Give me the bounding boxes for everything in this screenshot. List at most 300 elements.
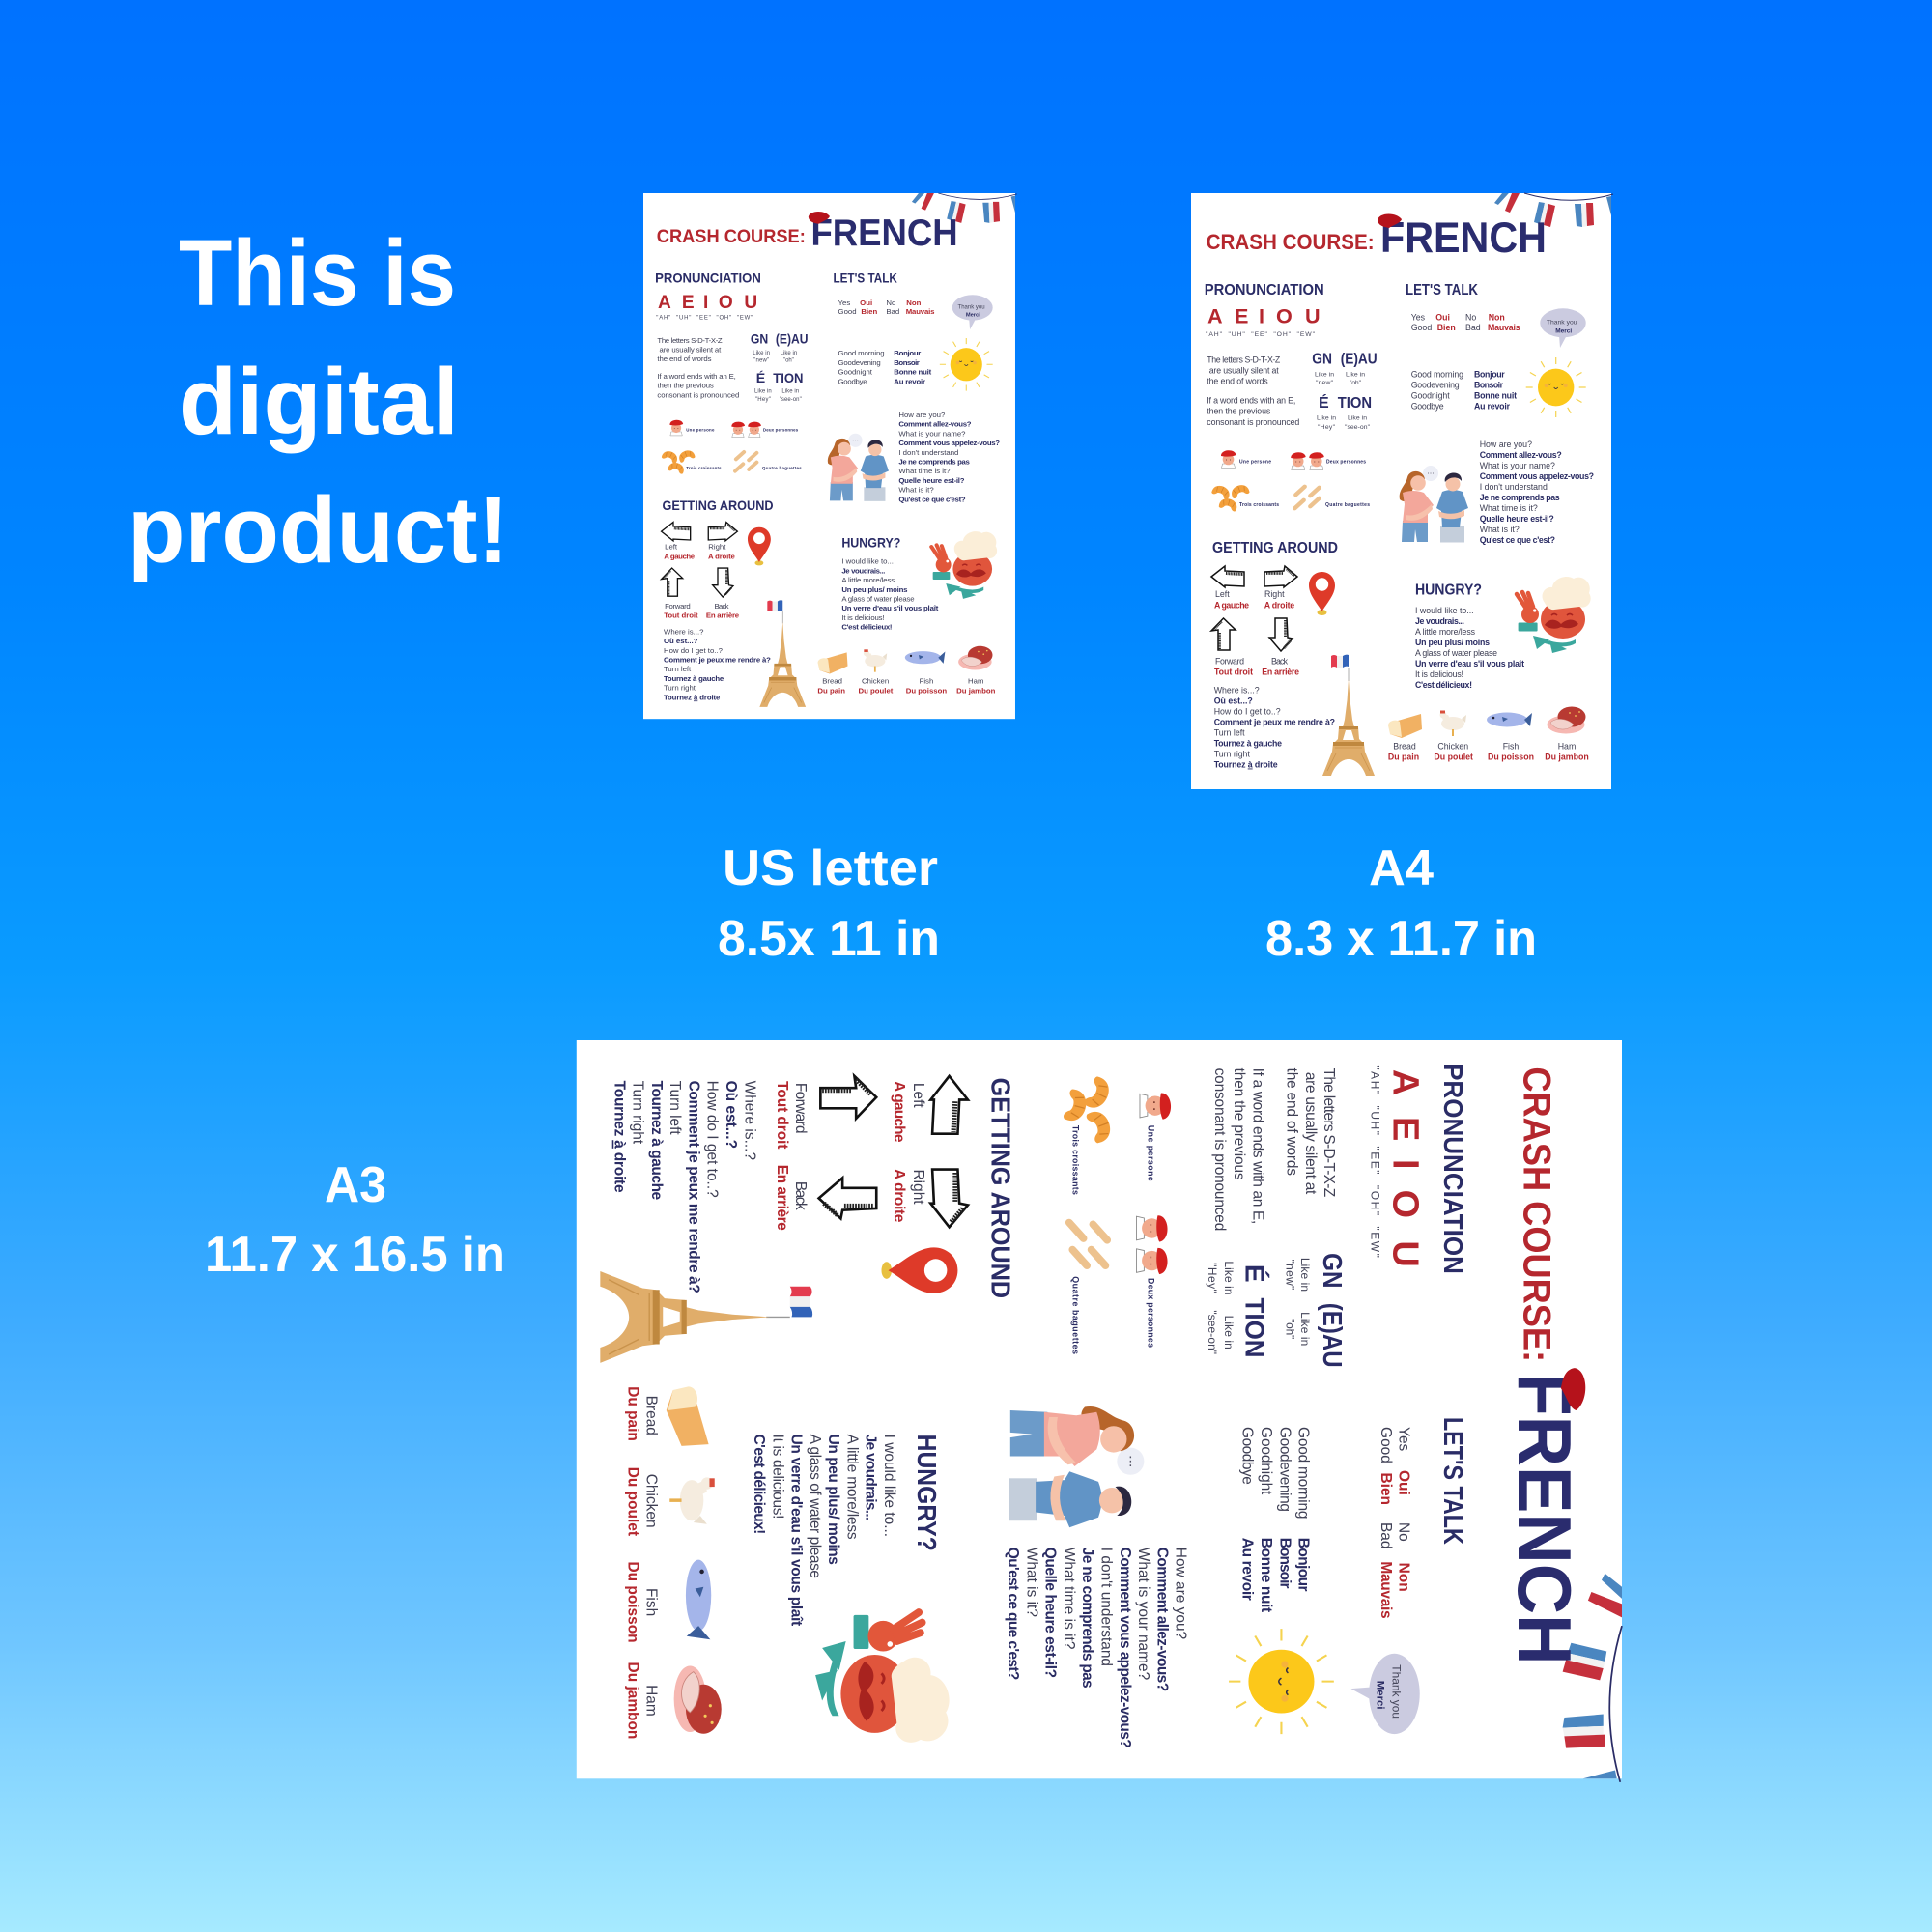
section: pronunciation: Like in <box>1298 1258 1312 1292</box>
section: hungry: I would like to... <box>881 1435 897 1537</box>
section: getting around: En arrière <box>774 1165 790 1231</box>
size label: A4: A4 <box>1369 840 1434 896</box>
icon: one person <box>1140 1093 1171 1120</box>
food row: Bread <box>1393 742 1416 752</box>
section: let's talk: What time is it? <box>1061 1548 1077 1650</box>
section: getting around: Tournez à droite <box>1214 759 1278 769</box>
title <box>1502 1066 1587 1665</box>
title: FRENCH <box>1502 1373 1587 1665</box>
section: getting around: Comment je peux me rendre à? <box>685 1081 701 1293</box>
section: pronunciation: "oh" <box>1350 380 1362 386</box>
section: let's talk: What time is it? <box>898 467 951 475</box>
section: hungry: I would like to... <box>1415 606 1474 615</box>
food row <box>817 646 996 695</box>
section: pronunciation: AEIOU <box>1385 1069 1426 1267</box>
section: pronunciation: Like in <box>1317 414 1336 421</box>
section: getting around: A droite <box>1264 600 1294 610</box>
food row: Du poisson <box>906 686 947 695</box>
section: pronunciation: If a word ends with an E, <box>1250 1068 1265 1224</box>
section: pronunciation: "new" <box>1316 380 1334 386</box>
section: let's talk: Bonjour <box>1295 1538 1312 1591</box>
section: getting around: A gauche <box>891 1081 907 1143</box>
food row: Chicken <box>643 1474 660 1528</box>
section: let's talk: Goodevening <box>1411 381 1460 390</box>
section: getting around: Tournez à gauche <box>664 674 724 683</box>
section: let's talk: Au revoir <box>894 377 925 385</box>
section: let's talk: Good <box>1378 1427 1394 1463</box>
section: pronunciation <box>655 270 809 403</box>
icon: croissants <box>661 448 696 474</box>
food row: Fish <box>1503 742 1519 752</box>
title: CRASH COURSE: <box>657 226 806 247</box>
section: let's talk: I don't understand <box>1098 1548 1115 1666</box>
section: getting around: En arrière <box>706 611 740 620</box>
headline: This is digital product! <box>128 220 509 582</box>
section: getting around: Back <box>1271 656 1289 666</box>
icon: one person <box>669 420 683 436</box>
icon: croissants <box>1063 1075 1114 1144</box>
section: getting around: Back <box>792 1181 809 1210</box>
section: let's talk: What is your name? <box>1135 1548 1151 1681</box>
section: pronunciation: are usually silent at <box>660 346 722 354</box>
food row: Bread <box>822 677 842 686</box>
section: pronunciation: the end of words <box>1284 1068 1300 1176</box>
food row: Ham <box>643 1685 660 1717</box>
section: pronunciation: "oh" <box>1284 1319 1297 1339</box>
section: pronunciation: "Hey" <box>1206 1263 1219 1293</box>
speech bubble: thank you: Merci <box>1375 1681 1386 1710</box>
icon: beret <box>1378 213 1402 228</box>
icon: baguettes <box>732 449 759 473</box>
section: let's talk: Je ne comprends pas <box>1480 493 1560 502</box>
section: let's talk: Bad <box>886 307 899 316</box>
section: let's talk: What is your name? <box>1480 461 1555 470</box>
section: let's talk: Mauvais <box>1378 1561 1394 1619</box>
section: getting around: How do I get to..? <box>1214 707 1281 717</box>
section: pronunciation: (E)AU <box>1318 1303 1348 1368</box>
headline: This is digital product!: This is <box>179 220 456 326</box>
food row: Du pain <box>624 1386 640 1441</box>
section: let's talk: Quelle heure est-il? <box>898 476 965 485</box>
section: getting around: Turn left <box>664 665 692 673</box>
speech bubble: thank you: Merci <box>966 312 980 318</box>
icon: sun <box>1229 1629 1334 1734</box>
section: getting around: Tout droit <box>774 1081 790 1149</box>
icon: Eiffel tower <box>1322 655 1375 776</box>
section: let's talk: Good <box>1411 323 1432 332</box>
section: let's talk: Goodnight <box>1411 391 1450 401</box>
food row: Du poulet <box>1434 752 1473 761</box>
section: hungry: I would like to... <box>841 557 894 566</box>
food row <box>624 1386 722 1739</box>
section: let's talk: Bonsoir <box>894 358 920 367</box>
section: let's talk: Goodevening <box>838 358 881 367</box>
food row: Bread <box>643 1396 660 1435</box>
section: pronunciation: GN <box>1318 1253 1348 1289</box>
section: pronunciation: É <box>1240 1264 1270 1283</box>
section: pronunciation: Like in <box>1222 1261 1236 1295</box>
section: let's talk: Goodnight <box>1258 1427 1274 1495</box>
section: pronunciation: are usually silent at <box>1302 1072 1319 1195</box>
section: let's talk: What is it? <box>1480 525 1520 534</box>
section: hungry: A little more/less <box>841 576 895 584</box>
section: let's talk: Bonsoir <box>1474 381 1504 390</box>
label: quatre baguettes: Quatre baguettes <box>762 466 802 470</box>
size label: A4 <box>1265 840 1537 967</box>
section: let's talk: What is it? <box>1023 1548 1039 1617</box>
section: let's talk: Qu'est ce que c'est? <box>898 495 966 503</box>
section: getting around: Tournez à droite <box>611 1081 627 1193</box>
section: pronunciation: then the previous <box>1207 406 1271 415</box>
section: let's talk: Oui <box>1396 1470 1412 1495</box>
label: trois croissants: Trois croissants <box>1071 1125 1081 1195</box>
section: pronunciation: consonant is pronounced <box>1211 1068 1228 1231</box>
section: let's talk: Goodnight <box>838 368 873 377</box>
section: hungry: It is delicious! <box>769 1435 785 1519</box>
section: let's talk: Oui <box>1435 312 1450 322</box>
section: let's talk: Goodevening <box>1276 1427 1293 1512</box>
section: let's talk: Oui <box>860 298 872 307</box>
section: getting around: A droite <box>891 1169 907 1223</box>
food row: Du poisson <box>1488 752 1534 761</box>
section: pronunciation: Like in <box>781 389 799 395</box>
section: let's talk: Je ne comprends pas <box>1079 1548 1095 1689</box>
section: let's talk: No <box>1465 312 1476 322</box>
section: let's talk: Bonjour <box>1474 370 1505 380</box>
section: pronunciation: "AH" "UH" "EE" "OH" "EW" <box>1368 1065 1381 1258</box>
bunting <box>1494 193 1613 227</box>
section: hungry: A glass of water please <box>841 594 915 603</box>
section: getting around <box>611 1076 1015 1298</box>
section: getting around: Where is...? <box>741 1081 757 1160</box>
section: getting around: Right <box>910 1170 926 1205</box>
section: hungry: Un verre d'eau s'il vous plaît <box>1415 659 1524 668</box>
food row: Ham <box>1558 742 1576 752</box>
section: pronunciation: If a word ends with an E, <box>657 372 736 381</box>
section: let's talk: Good morning <box>1411 370 1463 380</box>
food row: Du jambon <box>624 1662 640 1739</box>
title <box>657 212 958 254</box>
section: pronunciation: (E)AU <box>776 331 809 346</box>
section: let's talk: Qu'est ce que c'est? <box>1480 535 1555 545</box>
food row: Fish <box>920 677 933 686</box>
section: let's talk: I don't understand <box>1480 482 1548 492</box>
section: let's talk: LET'S TALK <box>1406 282 1478 298</box>
speech bubble: thank you <box>1540 308 1586 348</box>
section: let's talk: Bien <box>861 307 878 316</box>
title: FRENCH <box>810 212 958 254</box>
section: let's talk: How are you? <box>898 411 946 419</box>
section: pronunciation: Like in <box>1315 371 1334 378</box>
section: getting around: GETTING AROUND <box>1212 540 1338 556</box>
section: pronunciation: The letters S-D-T-X-Z <box>1207 355 1281 365</box>
speech bubble: thank you: Thank you <box>1547 319 1577 327</box>
section: let's talk: What is it? <box>898 486 934 495</box>
section: pronunciation: PRONUNCIATION <box>1205 282 1324 298</box>
food row: Du poisson <box>624 1561 640 1643</box>
title <box>1207 214 1547 262</box>
speech bubble: thank you: Thank you <box>958 305 985 311</box>
food row: Chicken <box>862 677 889 686</box>
section: pronunciation: Like in <box>781 351 797 356</box>
food row <box>1388 707 1589 761</box>
section: let's talk: Bad <box>1465 323 1481 332</box>
panel: A3 poster rotated <box>577 1040 1622 1782</box>
section: getting around: Back <box>714 602 729 611</box>
section: pronunciation: AEIOU <box>658 293 757 313</box>
section: let's talk: Goodbye <box>1239 1427 1256 1485</box>
label: une persone: Une persone <box>1239 460 1271 466</box>
section: hungry <box>1415 582 1524 690</box>
section: let's talk <box>1406 282 1594 545</box>
section: let's talk: Mauvais <box>906 307 935 316</box>
section: getting around: A gauche <box>1214 600 1249 610</box>
section: getting around: GETTING AROUND <box>662 497 774 513</box>
section: let's talk: Good <box>838 307 857 316</box>
food row: Du pain <box>817 686 845 695</box>
section: getting around: Tout droit <box>664 611 698 620</box>
title: CRASH COURSE: <box>1515 1066 1557 1362</box>
section: hungry: HUNGRY? <box>1415 582 1482 599</box>
section: pronunciation: Like in <box>1346 371 1365 378</box>
section: pronunciation: TION <box>1240 1298 1270 1358</box>
section: pronunciation: É <box>756 370 765 385</box>
section: getting around: Où est...? <box>1214 696 1253 705</box>
icon: sun <box>1526 357 1586 417</box>
section: getting around: Forward <box>792 1083 809 1134</box>
section: hungry: Un peu plus/ moins <box>841 585 907 594</box>
label: deux personnes: Deux personnes <box>1326 460 1366 466</box>
panel: A4 poster <box>1191 193 1613 789</box>
section: let's talk: Au revoir <box>1239 1538 1256 1601</box>
section: getting around: GETTING AROUND <box>986 1078 1015 1298</box>
section: pronunciation: Like in <box>1222 1316 1236 1350</box>
section: let's talk: Bien <box>1378 1473 1394 1505</box>
section: hungry: Un verre d'eau s'il vous plaît <box>841 604 939 612</box>
section: hungry: A little more/less <box>843 1435 860 1540</box>
section: getting around: Turn right <box>1214 750 1251 759</box>
illustration: couple talking <box>828 434 889 501</box>
section: let's talk: How are you? <box>1480 440 1532 449</box>
illustration: chef <box>815 1612 950 1743</box>
section: hungry: HUNGRY? <box>912 1435 942 1551</box>
section: pronunciation: GN <box>751 331 768 346</box>
illustration: couple talking <box>1400 466 1468 543</box>
section: let's talk <box>1005 1417 1468 1748</box>
section: pronunciation: (E)AU <box>1341 351 1378 367</box>
section: getting around: Comment je peux me rendre à? <box>664 656 771 665</box>
section: let's talk: Comment allez-vous? <box>1480 450 1562 460</box>
bunting <box>1563 1574 1622 1782</box>
label: deux personnes: Deux personnes <box>1147 1278 1156 1348</box>
section: let's talk: Good morning <box>838 349 885 357</box>
section: let's talk: Non <box>906 298 922 307</box>
size label: US letter <box>718 840 940 967</box>
speech bubble: thank you <box>1350 1654 1420 1734</box>
food row: Du poulet <box>624 1467 640 1536</box>
section: let's talk: No <box>1396 1522 1412 1542</box>
section: pronunciation: "AH" "UH" "EE" "OH" "EW" <box>1206 331 1316 338</box>
icon: two people <box>1291 452 1324 469</box>
section: let's talk: Comment vous appelez-vous? <box>1117 1548 1133 1748</box>
illustration: chef <box>1517 577 1591 653</box>
section: getting around: A droite <box>708 553 736 561</box>
section: hungry: It is delicious! <box>1415 669 1463 679</box>
section: let's talk: What time is it? <box>1480 503 1538 513</box>
icon: one person <box>1221 450 1236 468</box>
icon: two people <box>1136 1215 1168 1274</box>
section: getting around: Where is...? <box>664 627 704 636</box>
section: getting around: Left <box>910 1083 926 1108</box>
section: hungry: Je voudrais... <box>863 1435 879 1520</box>
section: getting around: A gauche <box>664 553 696 561</box>
section: getting around: Forward <box>1215 656 1244 666</box>
section: let's talk: Comment vous appelez-vous? <box>1480 471 1594 481</box>
section: getting around: Left <box>1215 589 1230 599</box>
section: hungry: It is delicious! <box>841 613 885 622</box>
label: deux personnes: Deux personnes <box>763 428 799 433</box>
section: hungry: A glass of water please <box>1415 648 1497 658</box>
section: getting around: Where is...? <box>1214 686 1260 696</box>
title: CRASH COURSE: <box>1207 230 1375 254</box>
icon: beret <box>809 212 830 224</box>
section: getting around: En arrière <box>1262 667 1299 676</box>
section: let's talk: Goodbye <box>838 377 867 385</box>
food row: Chicken <box>1437 742 1468 752</box>
section: pronunciation: are usually silent at <box>1209 365 1279 375</box>
section: let's talk: Au revoir <box>1474 402 1511 412</box>
icon: two people <box>731 422 761 438</box>
section: pronunciation: AEIOU <box>1208 304 1321 328</box>
section: pronunciation: É <box>1319 393 1329 412</box>
section: pronunciation: PRONUNCIATION <box>655 270 761 286</box>
title: FRENCH <box>1380 214 1547 262</box>
section: let's talk: Bonne nuit <box>894 368 932 377</box>
section: getting around: Forward <box>665 602 691 611</box>
section: hungry: Un verre d'eau s'il vous plaît <box>788 1435 805 1626</box>
section: let's talk: Comment vous appelez-vous? <box>898 439 1000 447</box>
icon: croissants <box>1211 483 1250 512</box>
section: let's talk: What is your name? <box>898 429 966 438</box>
section: pronunciation: consonant is pronounced <box>657 391 739 400</box>
section: pronunciation: TION <box>773 370 803 385</box>
label: une persone: Une persone <box>1147 1125 1156 1181</box>
section: pronunciation: "Hey" <box>755 397 771 403</box>
section: pronunciation: "see-on" <box>780 397 802 403</box>
size label: A3: 11.7 x 16.5 in <box>205 1227 505 1283</box>
section: getting around: Right <box>708 543 726 552</box>
section: pronunciation: The letters S-D-T-X-Z <box>657 336 723 345</box>
section: let's talk: Je ne comprends pas <box>898 457 970 466</box>
icon: Eiffel tower <box>600 1271 812 1363</box>
section: let's talk: Quelle heure est-il? <box>1042 1548 1059 1678</box>
section: pronunciation: the end of words <box>1207 377 1268 386</box>
section: pronunciation: "AH" "UH" "EE" "OH" "EW" <box>656 316 753 322</box>
section: hungry: C'est délicieux! <box>751 1435 767 1534</box>
section: hungry: Je voudrais... <box>1415 616 1464 626</box>
section: let's talk: No <box>886 298 895 307</box>
section: pronunciation <box>1205 282 1378 431</box>
section: getting around: Turn left <box>1214 728 1245 738</box>
section: hungry: A glass of water please <box>807 1435 823 1578</box>
section: hungry: C'est délicieux! <box>1415 680 1472 690</box>
section: getting around: Comment je peux me rendre à? <box>1214 717 1335 726</box>
section: let's talk <box>833 270 1000 503</box>
headline: This is digital product!: product! <box>128 477 509 582</box>
section: let's talk: Bonne nuit <box>1474 391 1517 401</box>
section: let's talk: Bonne nuit <box>1258 1538 1274 1612</box>
icon: sun <box>940 338 993 391</box>
section: getting around: How do I get to..? <box>664 646 724 655</box>
label: quatre baguettes: Quatre baguettes <box>1071 1276 1081 1354</box>
speech bubble: thank you: Merci <box>1555 328 1572 334</box>
size label: US letter: 8.5x 11 in <box>718 911 940 967</box>
icon: baguettes <box>1064 1217 1113 1271</box>
food row: Ham <box>968 677 983 686</box>
size label: A4: 8.3 x 11.7 in <box>1265 911 1537 967</box>
section: getting around: Right <box>1264 589 1285 599</box>
section: let's talk: Bad <box>1378 1522 1394 1548</box>
section: getting around <box>662 497 774 701</box>
size label: A3 <box>205 1157 505 1283</box>
food row: Fish <box>643 1588 660 1616</box>
section: hungry <box>841 534 939 632</box>
section: pronunciation: Like in <box>753 351 770 356</box>
section: let's talk: Non <box>1396 1563 1412 1592</box>
speech bubble: thank you: Thank you <box>1389 1664 1403 1719</box>
section: pronunciation <box>1206 1064 1468 1368</box>
section: hungry: HUNGRY? <box>841 534 900 550</box>
panel: US letter poster <box>643 193 1017 719</box>
icon: beret <box>1561 1368 1585 1410</box>
section: pronunciation: the end of words <box>657 355 712 363</box>
section: getting around: Left <box>665 543 678 552</box>
section: pronunciation: Like in <box>1298 1312 1312 1346</box>
section: let's talk: Yes <box>838 298 850 307</box>
food row: Du jambon <box>956 686 996 695</box>
section: let's talk: Yes <box>1396 1427 1412 1452</box>
section: hungry: C'est délicieux! <box>841 623 893 632</box>
speech bubble: thank you <box>952 295 993 329</box>
section: let's talk: Goodbye <box>1411 402 1444 412</box>
section: getting around: Turn left <box>667 1081 683 1135</box>
section: getting around: Turn right <box>664 684 696 693</box>
section: pronunciation: "oh" <box>783 358 794 364</box>
section: let's talk: Bonsoir <box>1276 1538 1293 1589</box>
section: hungry: Je voudrais... <box>841 566 885 575</box>
section: let's talk: Yes <box>1411 312 1426 322</box>
label: trois croissants: Trois croissants <box>1239 502 1279 508</box>
section: hungry: Un peu plus/ moins <box>825 1435 841 1565</box>
section: pronunciation: "see-on" <box>1206 1310 1219 1354</box>
section: let's talk: Comment allez-vous? <box>1153 1548 1170 1691</box>
section: pronunciation: PRONUNCIATION <box>1438 1064 1468 1274</box>
section: getting around: Où est...? <box>664 637 698 645</box>
section: pronunciation: GN <box>1312 351 1332 367</box>
section: pronunciation: "Hey" <box>1318 424 1336 431</box>
section: pronunciation: consonant is pronounced <box>1207 417 1299 427</box>
section: getting around: Où est...? <box>723 1081 739 1149</box>
section: getting around: Tournez à droite <box>664 693 721 701</box>
section: pronunciation: "new" <box>1284 1260 1297 1290</box>
section: pronunciation: Like in <box>1348 414 1367 421</box>
section: let's talk: I don't understand <box>898 448 958 457</box>
section: hungry <box>751 1435 942 1626</box>
icon: baguettes <box>1292 484 1322 511</box>
section: getting around: Turn right <box>630 1081 646 1145</box>
section: pronunciation: TION <box>1338 395 1372 412</box>
section: pronunciation: If a word ends with an E, <box>1207 396 1295 406</box>
